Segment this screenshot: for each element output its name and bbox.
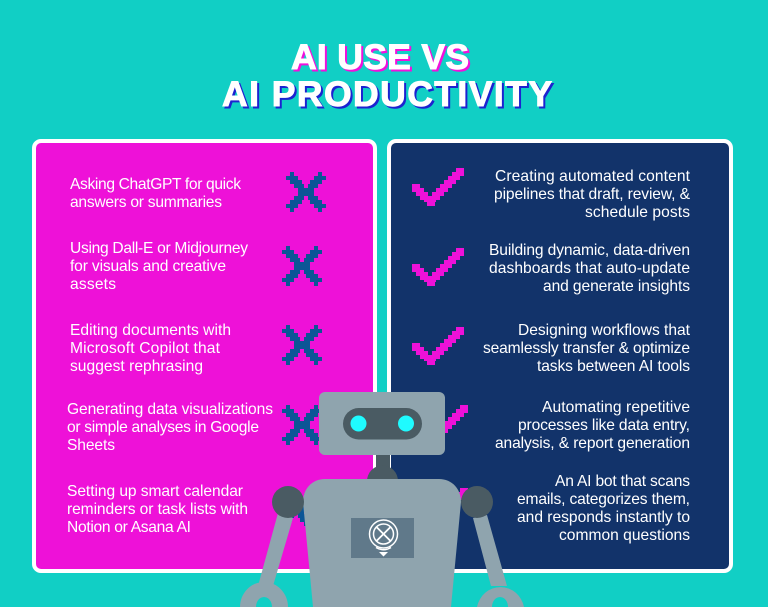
icon: check 3 xyxy=(412,327,464,365)
robot right arm xyxy=(473,515,524,607)
icon: logo xyxy=(370,520,398,556)
item: ChatGPT answers: answers or summaries xyxy=(70,194,222,211)
item: dashboards xyxy=(489,242,690,295)
icon: cross 1 xyxy=(286,172,326,212)
item: workflows: seamlessly transfer & optimize xyxy=(483,340,690,357)
item: smart calendar: Setting up smart calendar xyxy=(67,483,243,500)
item: AI bot: An AI bot that scans xyxy=(555,473,690,490)
item: Microsoft Copilot: suggest rephrasing xyxy=(70,358,203,375)
item: ChatGPT answers: Asking ChatGPT for quick xyxy=(70,176,241,193)
item: content pipelines: Creating automated content xyxy=(495,168,691,185)
item: Google Sheets: or simple analyses in Google xyxy=(67,419,259,436)
chest plate with logo xyxy=(351,518,414,558)
item: AI bot xyxy=(517,473,690,544)
item: workflows: Designing workflows that xyxy=(518,322,691,339)
icon: cross 3 xyxy=(282,325,322,365)
robot eyes xyxy=(350,416,414,432)
item: Microsoft Copilot: Microsoft Copilot that xyxy=(70,340,221,357)
item: AI bot: and responds instantly to xyxy=(517,509,690,526)
icon: cross 4 xyxy=(282,405,322,445)
item: dashboards: and generate insights xyxy=(543,278,690,295)
item: Dall-E or Midjourney xyxy=(70,240,248,293)
robot shoulders xyxy=(272,486,493,518)
item: workflows: tasks between AI tools xyxy=(537,358,690,375)
item: Dall-E or Midjourney: Using Dall-E or Midjourney xyxy=(70,240,248,257)
item: Google Sheets: Sheets xyxy=(67,437,115,454)
icon: cross 2 xyxy=(282,246,322,286)
title: AI PRODUCTIVITY xyxy=(222,74,552,114)
robot xyxy=(240,392,524,607)
item: automating processes: processes like data entry, xyxy=(518,417,690,434)
item: ChatGPT answers xyxy=(70,176,241,211)
panel: AI productivity xyxy=(389,141,731,571)
item: Microsoft Copilot xyxy=(70,322,231,375)
robot visor xyxy=(343,408,422,440)
title xyxy=(222,37,552,114)
item: automating processes: Automating repetitive xyxy=(542,399,690,416)
item: workflows xyxy=(483,322,691,375)
item: smart calendar: Notion or Asana AI xyxy=(67,519,191,536)
title: AI USE VS xyxy=(291,37,469,77)
item: Google Sheets: Generating data visualizations xyxy=(67,401,273,418)
item: Dall-E or Midjourney: assets xyxy=(70,276,116,293)
item: content pipelines: pipelines that draft, review, & xyxy=(494,186,691,203)
item: smart calendar: reminders or task lists with xyxy=(67,501,248,518)
icon: check 2 xyxy=(412,248,464,286)
panel: AI use xyxy=(34,141,375,571)
item: dashboards: Building dynamic, data-driven xyxy=(489,242,690,259)
icon: check 1 xyxy=(412,168,464,206)
item: AI bot: emails, categorizes them, xyxy=(517,491,690,508)
icon: check 5 xyxy=(416,488,468,526)
item: AI bot: common questions xyxy=(559,527,690,544)
item: Dall-E or Midjourney: for visuals and creative xyxy=(70,258,226,275)
item: automating processes xyxy=(495,399,690,452)
icon: check 4 xyxy=(416,405,468,443)
item: content pipelines: schedule posts xyxy=(585,204,690,221)
robot left arm xyxy=(240,513,293,607)
item: smart calendar xyxy=(67,483,248,536)
robot neck xyxy=(367,454,398,496)
icon: cross 5 xyxy=(276,490,316,530)
item: Google Sheets xyxy=(67,401,273,454)
item: content pipelines xyxy=(494,168,691,221)
robot body xyxy=(303,479,461,607)
item: dashboards: dashboards that auto-update xyxy=(489,260,690,277)
robot head xyxy=(319,392,445,455)
item: Microsoft Copilot: Editing documents with xyxy=(70,322,231,339)
item: automating processes: analysis, & report generation xyxy=(495,435,690,452)
